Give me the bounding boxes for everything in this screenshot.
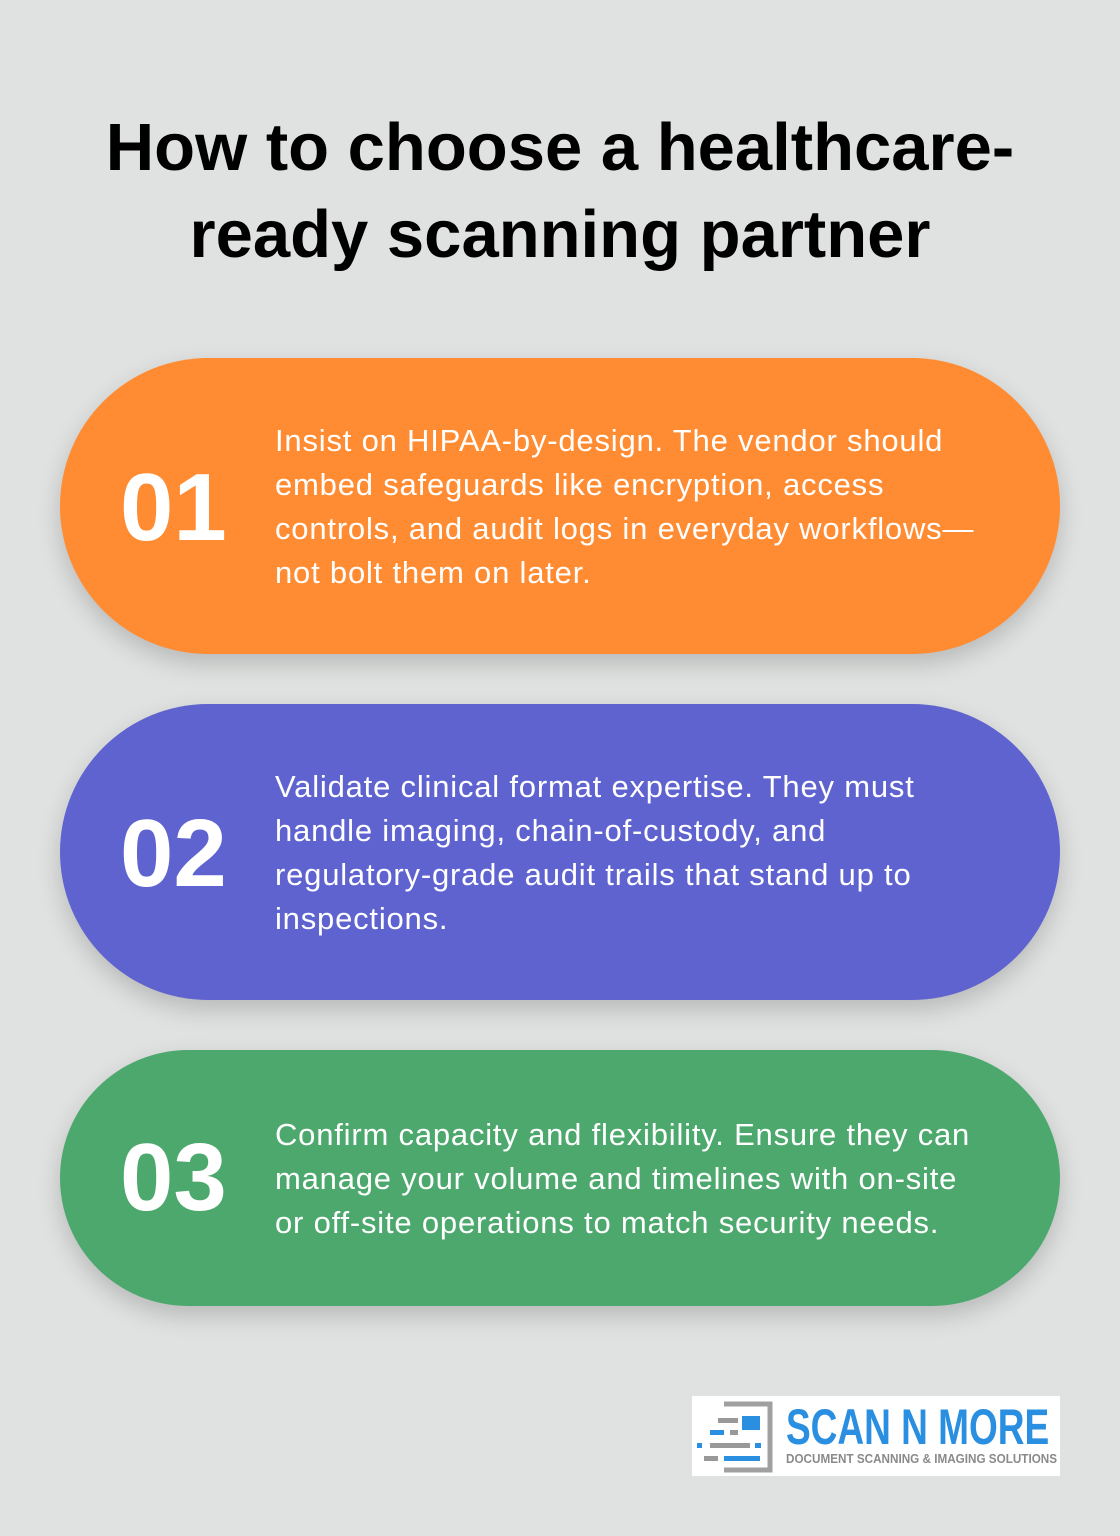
text 03 <box>275 1117 970 1240</box>
text 01: not bolt them on later. <box>275 555 592 590</box>
title: How to choose a healthcare- <box>106 110 1014 185</box>
text 03: or off-site operations to match security needs. <box>275 1205 939 1240</box>
text 01: embed safeguards like encryption, access <box>275 467 884 502</box>
text 02: handle imaging, chain-of-custody, and <box>275 813 826 848</box>
text 01: Insist on HIPAA-by-design. The vendor should <box>275 423 943 458</box>
panel: step 03 <box>60 1050 1060 1306</box>
panel: step 02 <box>60 704 1060 1000</box>
text 02: Validate clinical format expertise. They must <box>275 769 915 804</box>
text 02 <box>275 769 915 936</box>
panel: step 01 <box>60 358 1060 654</box>
logo wordmark: SCAN N MORE <box>786 1399 1049 1455</box>
text 03: Confirm capacity and flexibility. Ensure they can <box>275 1117 970 1152</box>
text 02: inspections. <box>275 901 448 936</box>
text 02: regulatory-grade audit trails that stand up to <box>275 857 912 892</box>
logo <box>692 1396 1060 1476</box>
number 03: 03 <box>120 1124 227 1231</box>
text 01: controls, and audit logs in everyday workflows— <box>275 511 974 546</box>
text 01 <box>275 423 974 590</box>
title: ready scanning partner <box>190 197 930 272</box>
icon: scanner <box>697 1402 772 1472</box>
text 03: manage your volume and timelines with on-site <box>275 1161 957 1196</box>
logo tagline: DOCUMENT SCANNING & IMAGING SOLUTIONS <box>786 1451 1057 1466</box>
title <box>106 110 1014 272</box>
number 01: 01 <box>120 454 227 561</box>
number 02: 02 <box>120 800 227 907</box>
